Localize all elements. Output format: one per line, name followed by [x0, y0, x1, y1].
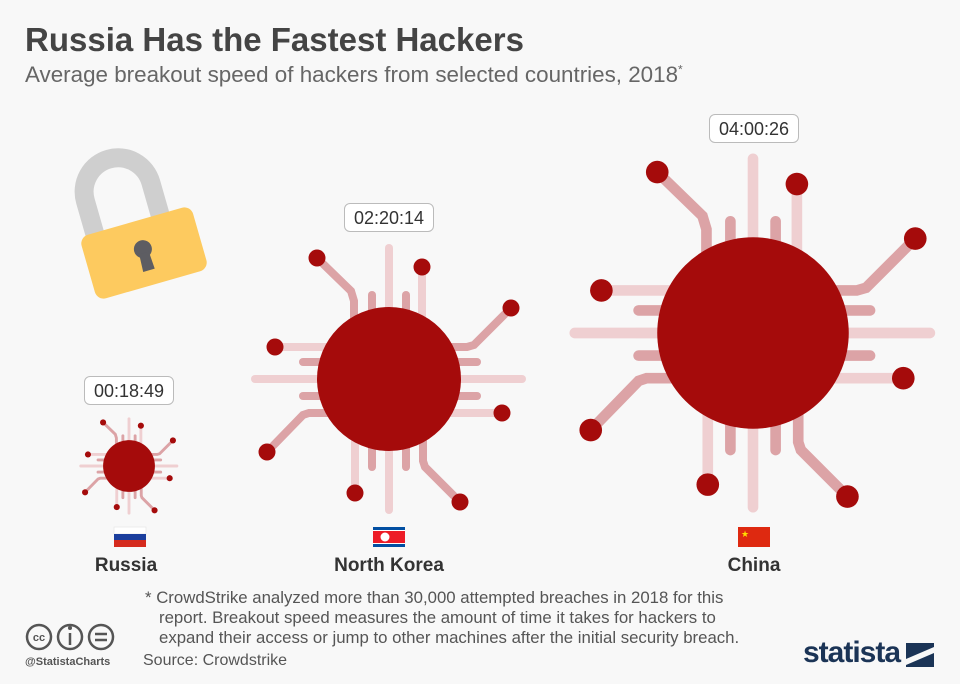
timer: North Korea [344, 203, 434, 232]
timer: China [709, 114, 799, 143]
label: North Korea: North Korea [334, 555, 444, 576]
timer: North Korea: 02:20:14 [354, 208, 424, 228]
footnote [145, 588, 739, 647]
timer: Russia: 00:18:49 [94, 381, 164, 401]
flag: China [738, 527, 770, 547]
text: cc [33, 632, 45, 644]
handle: @StatistaCharts [25, 656, 110, 668]
subtitle: Average breakout speed of hackers from selected countries, 2018* [25, 62, 683, 87]
virus: North Korea [255, 248, 522, 510]
footnote: * CrowdStrike analyzed more than 30,000 attempted breaches in 2018 for this [145, 588, 723, 607]
virus: Russia [81, 419, 177, 513]
flag: Russia [114, 527, 146, 547]
cc icons [27, 625, 113, 649]
statista logo: statista [803, 636, 900, 669]
flag: China: ★ [741, 529, 749, 539]
source: Source: Crowdstrike [143, 652, 287, 669]
footnote: expand their access or jump to other machines after the initial security breach. [159, 628, 739, 647]
flag: North Korea [373, 527, 405, 547]
title: Russia Has the Fastest Hackers [25, 21, 524, 58]
timer: China: 04:00:26 [719, 119, 789, 139]
label: China: China [728, 555, 780, 576]
icon: padlock [61, 141, 209, 301]
label: Russia: Russia [95, 555, 157, 576]
footnote: report. Breakout speed measures the amount of time it takes for hackers to [159, 608, 716, 627]
timer: Russia [84, 376, 174, 405]
virus: China [575, 159, 930, 508]
statista logo mark [906, 643, 934, 667]
